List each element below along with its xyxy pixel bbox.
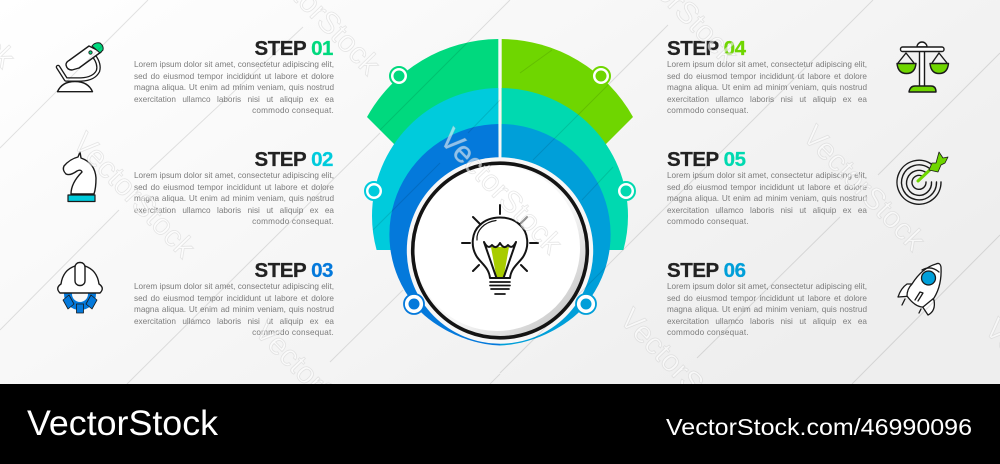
step 02 body: commodo consequat.	[252, 217, 334, 226]
step 02 text	[134, 148, 334, 226]
step 05 body: sed do eiusmod tempor incididunt ut labore et dolore	[667, 182, 867, 192]
step 04 body: sed do eiusmod tempor incididunt ut labore et dolore	[667, 72, 867, 80]
step 02 body: Lorem ipsum dolor sit amet, consectetur adipiscing elit,	[134, 171, 334, 180]
marker: step 01	[390, 67, 408, 85]
footer band	[0, 384, 1000, 464]
step 05 heading: STEP 05	[667, 148, 746, 171]
step 02 body: sed do eiusmod tempor incididunt ut labore et dolore	[134, 182, 334, 192]
watermarks: VectorStock	[796, 119, 932, 258]
step 01 heading: STEP 01	[254, 37, 333, 60]
central diagram	[365, 39, 635, 346]
step 05 text	[667, 148, 867, 226]
step 06 body: commodo consequat.	[667, 328, 749, 337]
step 06 body: sed do eiusmod tempor incididunt ut labore et dolore	[667, 294, 867, 302]
step 03 body: commodo consequat.	[252, 328, 334, 337]
step 01 body: commodo consequat.	[252, 106, 334, 115]
watermarks: VectorStock	[248, 314, 384, 453]
step 03 body: magna aliqua. Ut enim ad minim veniam, quis nostrud	[134, 305, 334, 314]
step 02 heading: STEP 02	[254, 148, 333, 171]
icon: microscope	[58, 43, 103, 92]
step 04 body	[667, 60, 867, 115]
step 03 heading: STEP 03	[254, 259, 333, 282]
step 04 body: magna aliqua. Ut enim ad minim veniam, quis nostrud	[667, 83, 867, 92]
center disc	[407, 157, 593, 344]
step 03 body	[134, 282, 334, 337]
segment: step 06 light blue	[500, 124, 611, 346]
segment: step 01 green	[367, 39, 498, 146]
icon: target with dart	[897, 152, 948, 204]
step 02 body: exercitation ullamco laboris nisi ut aliquip ex ea	[134, 206, 334, 214]
step 06 text	[667, 259, 867, 337]
step 01 body	[134, 60, 334, 115]
step 01 text	[134, 37, 334, 115]
step 05 body: Lorem ipsum dolor sit amet, consectetur adipiscing elit,	[667, 171, 867, 180]
step 05 body	[667, 171, 867, 226]
watermarks: VectorStock	[433, 122, 569, 261]
icon: rocket	[898, 263, 941, 315]
step 04 heading: STEP 04	[667, 37, 746, 60]
segment: step 05 teal	[502, 88, 628, 250]
segment: step 02 cyan	[372, 88, 498, 250]
footer url text: VectorStock.com/46990096	[666, 414, 972, 440]
marker: step 02	[365, 182, 383, 200]
watermarks: VectorStock	[66, 126, 202, 265]
step 01 body: magna aliqua. Ut enim ad minim veniam, quis nostrud	[134, 83, 334, 92]
step 03 text	[134, 259, 334, 337]
step 03 body: exercitation ullamco laboris nisi ut aliquip ex ea	[134, 316, 334, 326]
marker: step 03	[404, 294, 424, 314]
step 05 body: magna aliqua. Ut enim ad minim veniam, quis nostrud	[667, 194, 867, 203]
step 06 body	[667, 282, 867, 337]
icon: helmet and gear	[58, 262, 102, 313]
watermarks: VectorStock	[613, 302, 749, 441]
step 04 body: exercitation ullamco laboris nisi ut aliquip ex ea	[667, 94, 867, 104]
step 06 heading: STEP 06	[667, 259, 746, 282]
icon: chess knight	[63, 152, 96, 202]
segment: step 03 blue	[389, 124, 500, 346]
step 05 body: exercitation ullamco laboris nisi ut aliquip ex ea	[667, 206, 867, 214]
step 06 body: Lorem ipsum dolor sit amet, consectetur adipiscing elit,	[667, 282, 867, 291]
step 01 body: exercitation ullamco laboris nisi ut aliquip ex ea	[134, 94, 334, 104]
step 01 body: sed do eiusmod tempor incididunt ut labore et dolore	[134, 72, 334, 80]
marker: step 05	[617, 182, 635, 200]
step 01 body: Lorem ipsum dolor sit amet, consectetur adipiscing elit,	[134, 60, 334, 69]
step 04 body: commodo consequat.	[667, 106, 749, 115]
segment: step 04 lime	[502, 39, 633, 146]
step 03 body: Lorem ipsum dolor sit amet, consectetur adipiscing elit,	[134, 282, 334, 291]
step 05 body: commodo consequat.	[667, 217, 749, 226]
marker: step 04	[592, 67, 610, 85]
step 06 body: exercitation ullamco laboris nisi ut aliquip ex ea	[667, 316, 867, 326]
footer logo text: VectorStock	[27, 404, 219, 443]
step 06 body: magna aliqua. Ut enim ad minim veniam, quis nostrud	[667, 305, 867, 314]
step 02 body: magna aliqua. Ut enim ad minim veniam, quis nostrud	[134, 194, 334, 203]
icon: balance scales	[897, 42, 948, 92]
icon: light bulb	[462, 205, 538, 294]
marker: step 06	[576, 294, 596, 314]
step 04 text	[667, 37, 867, 115]
step 04 body: Lorem ipsum dolor sit amet, consectetur adipiscing elit,	[667, 60, 867, 69]
step 02 body	[134, 171, 334, 226]
step 03 body: sed do eiusmod tempor incididunt ut labore et dolore	[134, 294, 334, 302]
